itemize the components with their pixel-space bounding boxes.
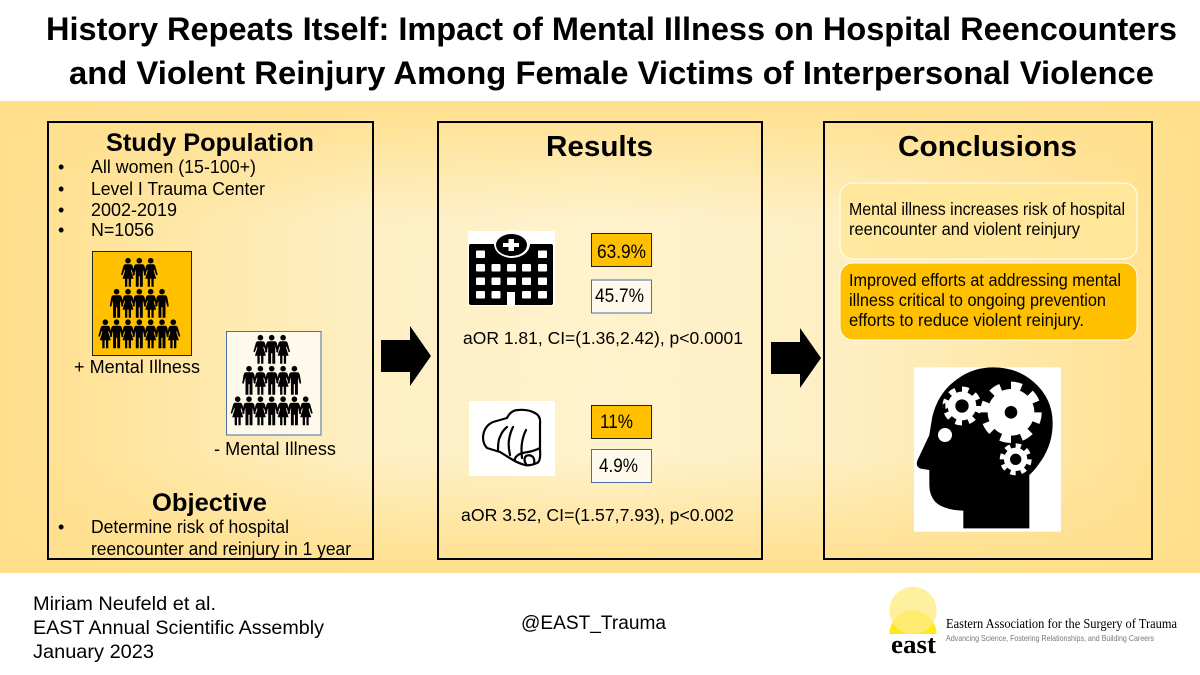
population bullet list: N=1056 xyxy=(91,220,154,240)
callout: improved efforts: Improved efforts at addressing mental xyxy=(849,270,1121,290)
title: and Violent Reinjury Among Female Victims of Interpersonal Violence xyxy=(69,55,1154,91)
stat: reinjury without mental illness xyxy=(592,450,652,482)
arrow: results to conclusions xyxy=(771,328,821,388)
footer: social handle: @EAST_Trauma xyxy=(521,612,666,634)
stat: reinjury with mental illness xyxy=(592,406,652,438)
text: reinjury odds ratio: aOR 3.52, CI=(1.57,7.93), p<0.002 xyxy=(461,505,734,525)
panel: study population xyxy=(48,122,373,559)
stat: reinjury with mental illness: 11% xyxy=(600,412,633,433)
footer: authors: Miriam Neufeld et al. xyxy=(33,593,216,615)
callout: improved efforts xyxy=(840,263,1137,340)
title xyxy=(46,11,1177,91)
footer: authors: EAST Annual Scientific Assembly xyxy=(33,617,324,639)
population bullet list: • xyxy=(58,220,64,240)
logo: east: Advancing Science, Fostering Relationships, and Building Careers xyxy=(946,633,1154,643)
objective text: • xyxy=(58,517,64,537)
stat: reencounter with mental illness xyxy=(592,234,652,266)
objective text xyxy=(58,517,351,559)
callout: mental illness risk xyxy=(840,183,1137,259)
text: reencounter odds ratio: aOR 1.81, CI=(1.36,2.42), p<0.0001 xyxy=(463,328,743,348)
heading: objective: Objective xyxy=(152,489,267,517)
logo: east: east xyxy=(891,630,936,659)
background band xyxy=(0,101,1200,573)
icon: head with gears xyxy=(914,367,1061,532)
population bullet list: • xyxy=(58,157,64,177)
icon: women without mental illness xyxy=(226,332,321,435)
footer: authors: January 2023 xyxy=(33,641,154,663)
population bullet list xyxy=(58,157,265,240)
stat: reencounter with mental illness: 63.9% xyxy=(597,242,646,263)
objective text: reencounter and reinjury in 1 year xyxy=(91,539,351,559)
population bullet list: 2002-2019 xyxy=(91,200,177,220)
callout: improved efforts: illness critical to ongoing prevention xyxy=(849,290,1106,310)
panel: conclusions xyxy=(824,122,1152,559)
logo: east: Eastern Association for the Surgery of Trauma xyxy=(946,617,1178,632)
population bullet list: All women (15-100+) xyxy=(91,157,256,177)
population bullet list: • xyxy=(58,179,64,199)
population bullet list: • xyxy=(58,200,64,220)
title: History Repeats Itself: Impact of Mental Illness on Hospital Reencounters xyxy=(46,11,1177,47)
callout: mental illness risk: reencounter and violent reinjury xyxy=(849,219,1080,239)
label: minus mental illness: - Mental Illness xyxy=(214,439,336,459)
icon: women with mental illness xyxy=(92,252,192,356)
label: plus mental illness: + Mental Illness xyxy=(74,357,200,377)
objective text: Determine risk of hospital xyxy=(91,517,289,537)
icon: hospital xyxy=(468,230,555,306)
panel: results xyxy=(438,122,762,559)
population bullet list: Level I Trauma Center xyxy=(91,179,265,199)
icon: fist xyxy=(469,401,555,476)
heading: study population: Study Population xyxy=(106,129,314,157)
stat: reencounter without mental illness: 45.7% xyxy=(595,286,644,307)
callout: improved efforts: efforts to reduce violent reinjury. xyxy=(849,310,1084,330)
stat: reinjury without mental illness: 4.9% xyxy=(599,456,638,477)
footer: authors xyxy=(33,593,324,663)
callout: mental illness risk: Mental illness increases risk of hospital xyxy=(849,199,1125,219)
logo: east xyxy=(889,587,1178,659)
arrow: population to results xyxy=(381,326,431,386)
heading: conclusions: Conclusions xyxy=(898,131,1077,163)
heading: results: Results xyxy=(546,131,653,163)
stat: reencounter without mental illness xyxy=(592,280,652,313)
